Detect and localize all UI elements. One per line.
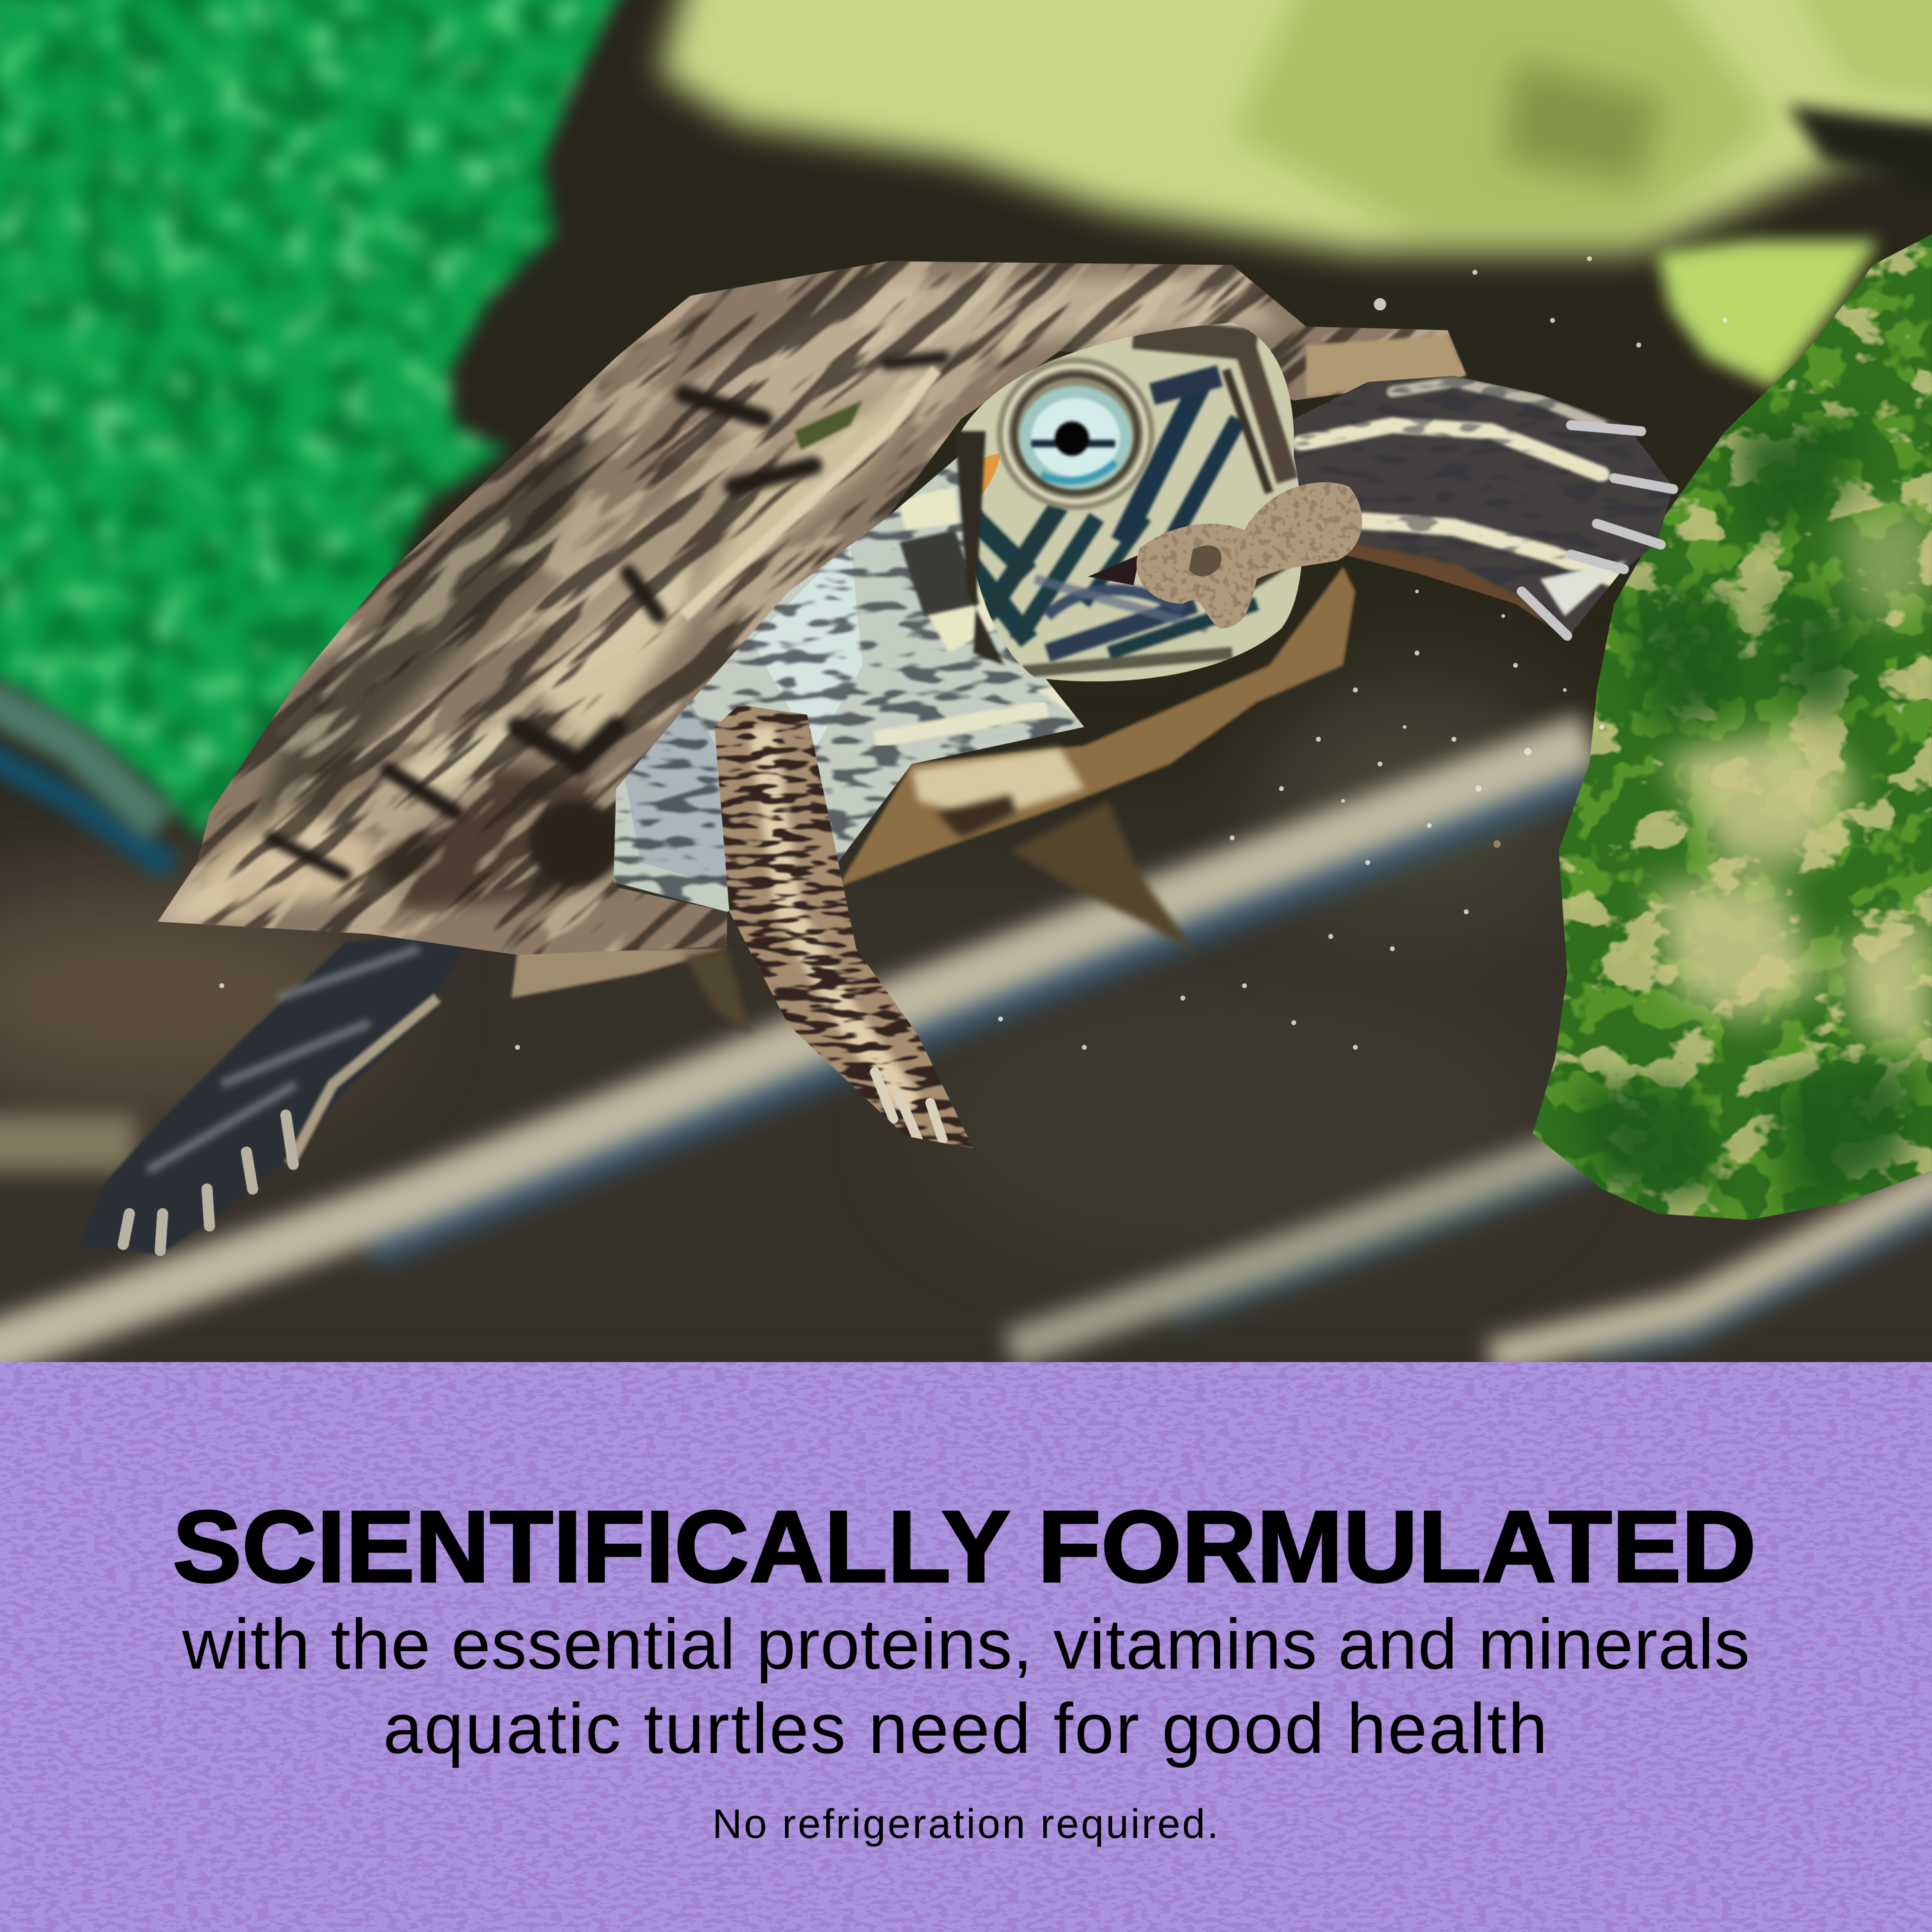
aquarium light bands bbox=[0, 739, 1932, 1358]
small leaf bbox=[1657, 240, 1879, 388]
floating particles bbox=[220, 256, 1727, 1050]
top blurred leaf bbox=[659, 0, 1932, 252]
back left leg bbox=[80, 931, 475, 1255]
spotted leaf on right bbox=[1515, 222, 1932, 1232]
photo: turtle in aquarium bbox=[0, 0, 1932, 1362]
head bbox=[936, 308, 1318, 690]
neck bbox=[591, 419, 1220, 936]
plastron and far limb bbox=[838, 567, 1356, 887]
subheading line 2: aquatic turtles need for good health bbox=[383, 1689, 1548, 1768]
water background bbox=[0, 676, 1932, 1362]
heading: SCIENTIFICALLY FORMULATED bbox=[173, 1490, 1756, 1604]
food pellet in mouth bbox=[1109, 468, 1380, 641]
subheading line 1: with the essential proteins, vitamins and minerals bbox=[182, 1605, 1750, 1684]
rear underside bbox=[511, 949, 727, 998]
panel background bbox=[0, 1362, 1932, 1932]
panel: purple caption band bbox=[0, 1362, 1932, 1932]
panel texture bbox=[0, 1362, 1932, 1932]
extended front flipper bbox=[1282, 363, 1688, 647]
center front leg bbox=[690, 690, 998, 1171]
back right leg bbox=[1010, 801, 1198, 955]
footnote: No refrigeration required. bbox=[712, 1801, 1218, 1847]
blue tube behind moss bbox=[0, 752, 173, 869]
eye bbox=[997, 357, 1155, 510]
green moss plant bbox=[0, 0, 641, 862]
